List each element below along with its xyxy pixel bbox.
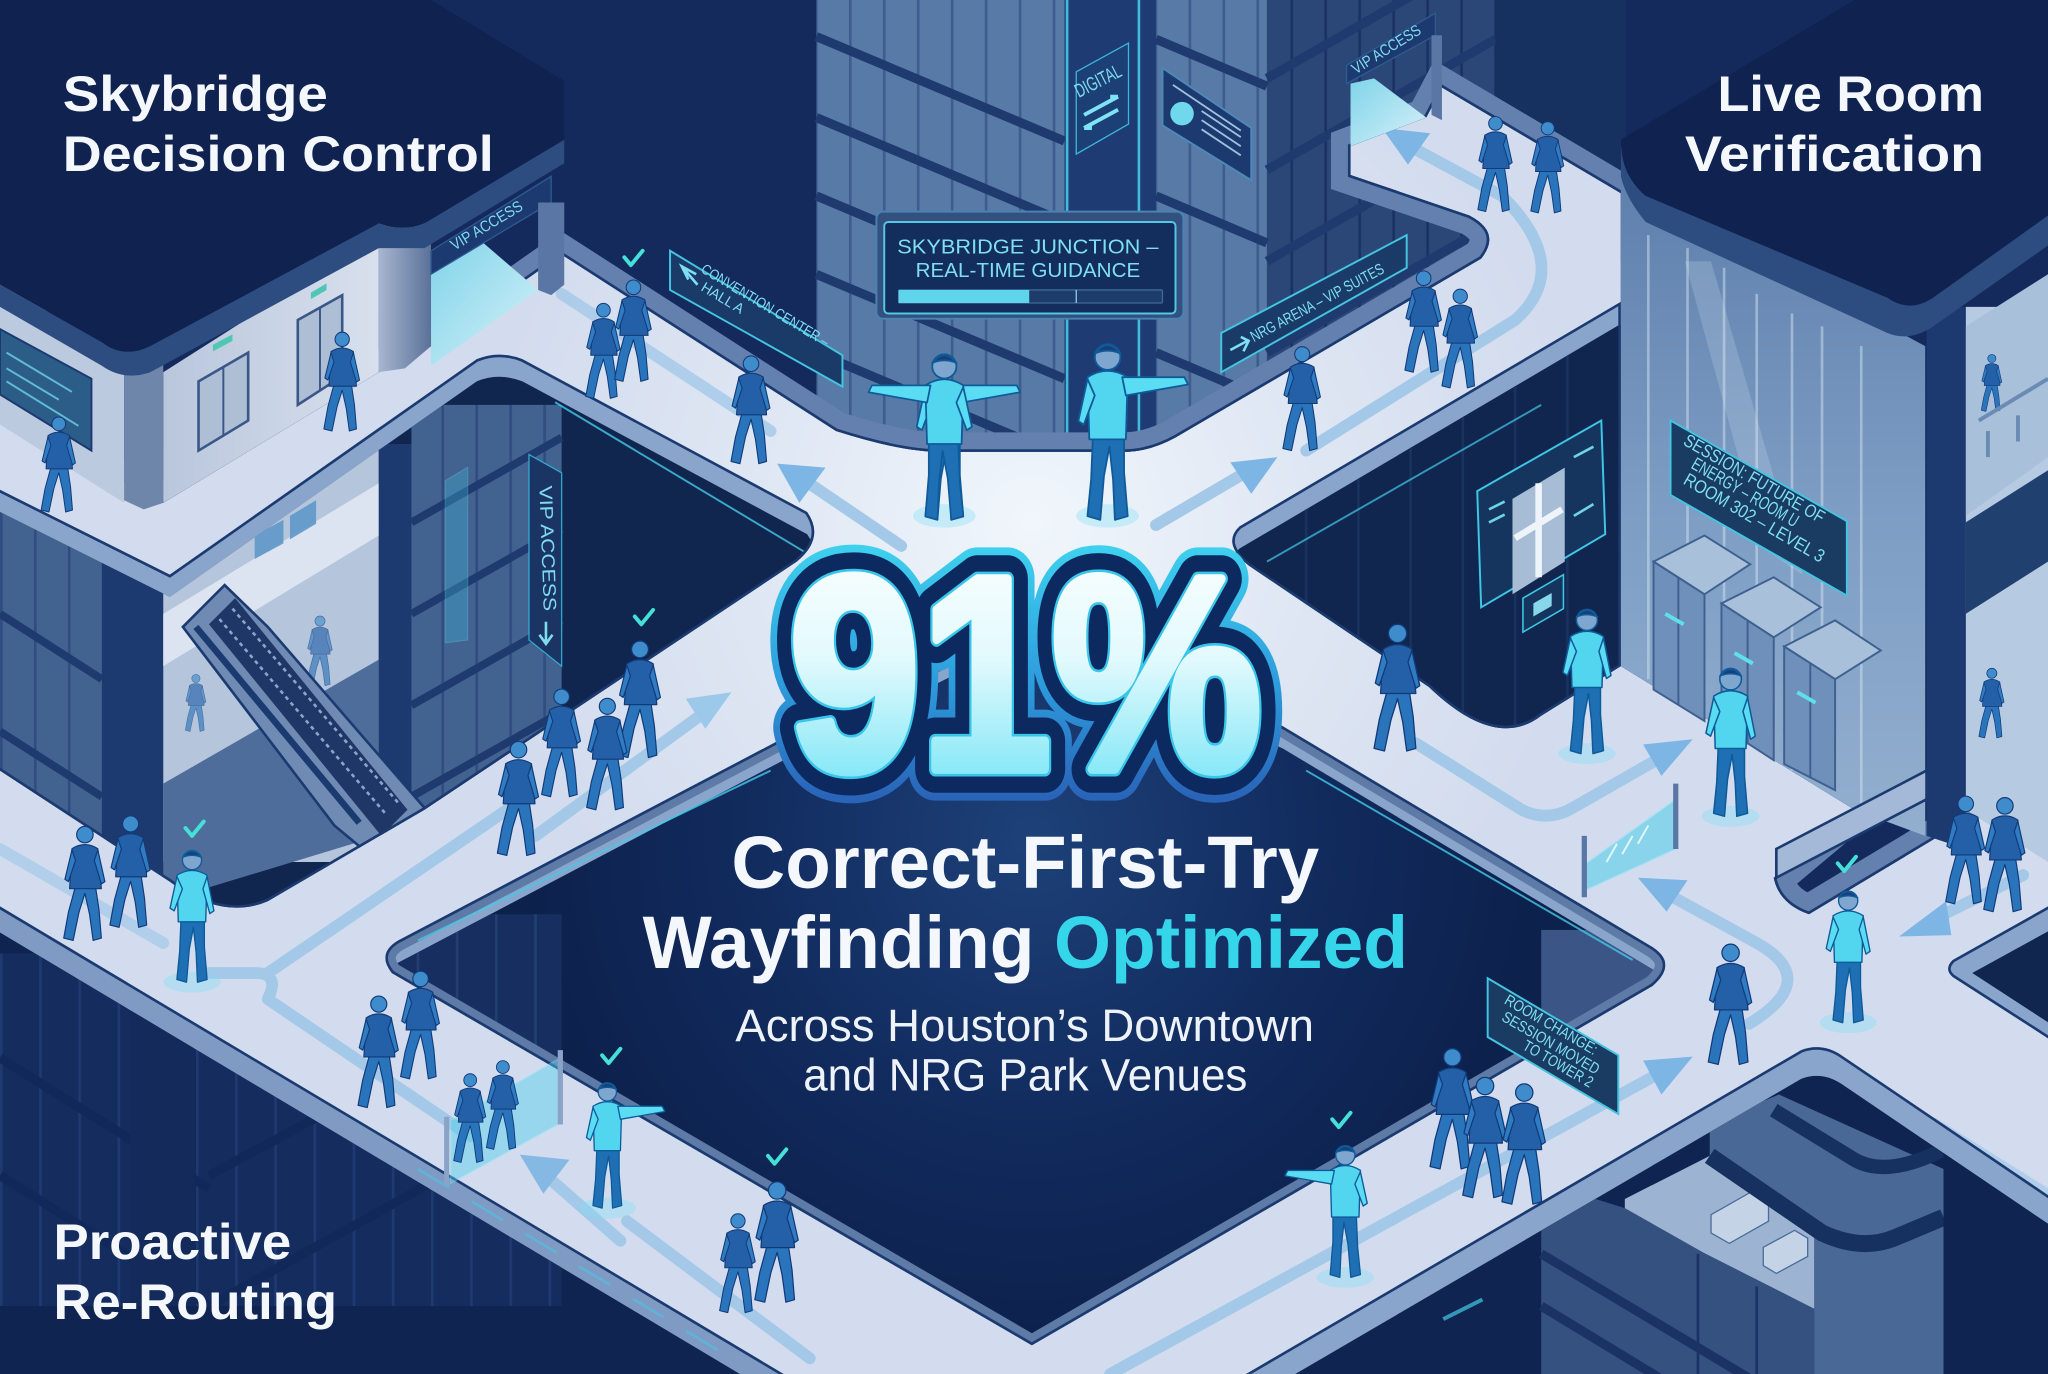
sign: Convention Center Hall A: CONVENTION CENTER – bbox=[698, 261, 832, 350]
wayfinding staff in cyan bbox=[170, 344, 1870, 1277]
central tower bbox=[816, 0, 1496, 470]
lower-right office building bbox=[1202, 1032, 2048, 1374]
staff glow halos bbox=[163, 504, 1877, 1288]
digital sign on tower: DIGITAL bbox=[1071, 60, 1125, 102]
hero number 91%: 91% bbox=[789, 518, 1262, 828]
sign: NRG Arena VIP Suites bbox=[1221, 235, 1407, 372]
VIP doorway bbox=[431, 176, 564, 366]
sign: Skybridge Junction real-time guidance: SKYBRIDGE JUNCTION – bbox=[897, 236, 1159, 258]
caption: across Houston venues: and NRG Park Venues bbox=[803, 1050, 1247, 1101]
sign: room change: TO TOWER 2 bbox=[1520, 1038, 1596, 1091]
sign: NRG Arena VIP Suites: NRG ARENA – VIP SUITES bbox=[1248, 261, 1387, 346]
sign: Convention Center Hall A bbox=[670, 251, 842, 387]
caption: across Houston venues bbox=[735, 1000, 1314, 1101]
holographic panel bbox=[445, 468, 468, 643]
subheading: Correct-First-Try Wayfinding Optimized: Correct-First-Try bbox=[731, 821, 1319, 904]
digital sign on tower bbox=[1071, 43, 1128, 154]
office workers in right rooms bbox=[1979, 354, 2048, 738]
rooftop text block bbox=[0, 0, 564, 352]
heading: Skybridge Decision Control: Decision Control bbox=[63, 126, 494, 182]
rail at far-right walkway bbox=[1776, 771, 1927, 878]
top-right building with glass lobby bbox=[1621, 0, 2048, 862]
center diamond background bbox=[385, 668, 1666, 1346]
small kiosk panel bbox=[1523, 575, 1563, 632]
office cubicles bbox=[1711, 1192, 1808, 1273]
heading: Proactive Re-Routing: Proactive bbox=[54, 1214, 291, 1270]
hero number 91%: 91% bbox=[789, 518, 1262, 828]
sign: Skybridge Junction real-time guidance bbox=[876, 212, 1183, 319]
caption: across Houston venues: Across Houston’s Downtown bbox=[735, 1000, 1314, 1051]
heading: Live Room Verification bbox=[1685, 66, 1984, 182]
subheading: Correct-First-Try Wayfinding Optimized: Optimized bbox=[1054, 901, 1408, 984]
left hole: escalator atrium bbox=[0, 340, 836, 927]
elevator doors bbox=[199, 283, 342, 451]
heading: Skybridge Decision Control: Skybridge bbox=[63, 66, 328, 122]
subheading: Correct-First-Try Wayfinding Optimized bbox=[643, 821, 1408, 984]
sign: session room: SESSION: FUTURE OF bbox=[1680, 429, 1829, 527]
heading: Proactive Re-Routing bbox=[54, 1214, 337, 1330]
right side hole bbox=[1948, 906, 2048, 1038]
verification check marks bbox=[185, 251, 1856, 1164]
escalator bbox=[183, 585, 428, 865]
hero number 91%: 91% bbox=[789, 518, 1262, 828]
glass barrier right bbox=[1584, 784, 1676, 897]
attendees on left diagonal walkway bbox=[64, 641, 660, 940]
lounge furniture bbox=[185, 500, 332, 731]
VIP access vertical sign bbox=[529, 455, 562, 666]
sign: session room: ENERGY – ROOM U bbox=[1688, 453, 1803, 531]
sign: room change: ROOM CHANGE: bbox=[1501, 992, 1600, 1059]
heading: Skybridge Decision Control bbox=[63, 66, 494, 182]
subheading: Correct-First-Try Wayfinding Optimized: Wayfinding bbox=[643, 901, 1034, 984]
pocket hole behind right walkway bbox=[1232, 302, 1621, 728]
top-left building bbox=[0, 0, 564, 509]
glass barrier left bbox=[447, 1050, 560, 1186]
floor map panel bbox=[1477, 421, 1605, 607]
attendees on right walkways bbox=[1374, 624, 2025, 1204]
sign: Convention Center Hall A: HALL A bbox=[698, 280, 747, 318]
attendees on upper-left walkway bbox=[41, 280, 770, 512]
attendees on lower-left walkway bbox=[358, 971, 798, 1313]
top region: towers bbox=[46, 0, 2048, 914]
sign: room change bbox=[1488, 978, 1618, 1114]
top-right VIP doorway bbox=[1347, 13, 1442, 146]
VIP doorway: VIP ACCESS bbox=[448, 198, 526, 254]
sign: session room bbox=[1671, 421, 1847, 596]
wall screen bbox=[0, 329, 91, 451]
elevator bays in lobby bbox=[1654, 535, 1881, 790]
tower info panel with pie chart bbox=[1162, 68, 1251, 180]
sign: session room: ROOM 302 – LEVEL 3 bbox=[1680, 469, 1829, 566]
heading: Proactive Re-Routing: Re-Routing bbox=[54, 1274, 337, 1330]
hero number 91%: 91% bbox=[789, 518, 1262, 828]
heading: Live Room Verification: Live Room bbox=[1718, 66, 1984, 122]
VIP access vertical sign: VIP ACCESS bbox=[535, 485, 561, 611]
lower-left dark building bbox=[0, 906, 784, 1374]
heading: Live Room Verification: Verification bbox=[1685, 126, 1984, 182]
sign: room change: SESSION MOVED bbox=[1499, 1009, 1602, 1078]
attendees on upper-right walkway bbox=[1283, 117, 1564, 451]
top-right VIP doorway: VIP ACCESS bbox=[1349, 22, 1424, 78]
sign: Skybridge Junction real-time guidance: REAL-TIME GUIDANCE bbox=[916, 260, 1140, 282]
